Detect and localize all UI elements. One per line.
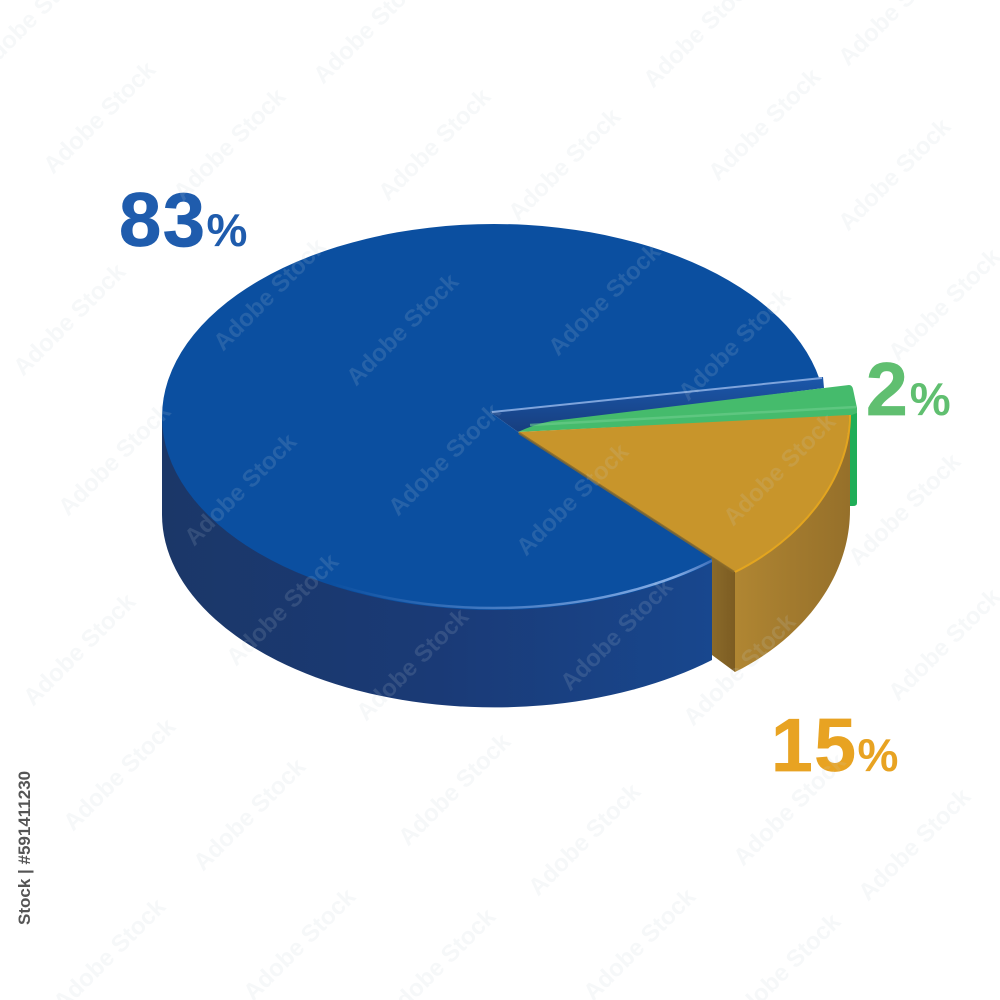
slice: 83% blue top (162, 224, 826, 610)
watermark: Adobe Stock (673, 283, 797, 406)
pie chart (162, 222, 857, 707)
watermark: Adobe Stock (393, 728, 517, 851)
watermark: Adobe Stock (341, 268, 465, 391)
highlight: green stripe (530, 407, 856, 425)
watermark: Adobe Stock (523, 778, 647, 901)
watermark: Adobe Stock (833, 113, 957, 236)
watermark: Adobe Stock (208, 233, 332, 356)
watermark: Adobe Stock (843, 448, 967, 571)
watermark: Adobe Stock (351, 603, 475, 726)
watermark: Adobe Stock (188, 753, 312, 876)
slice: 15% gold side wall (735, 415, 850, 672)
watermark: Adobe Stock (853, 783, 977, 906)
watermark: Adobe Stock (179, 428, 303, 551)
watermark: Adobe Stock (8, 258, 132, 381)
watermark: Adobe Stock (718, 408, 842, 531)
slice: 83% blue side wall (162, 417, 712, 707)
watermark: Adobe Stock (221, 548, 345, 671)
label: 15%: 15% (771, 703, 898, 787)
slice: 2% green side wall (848, 411, 857, 506)
slice: 15% gold top (518, 415, 849, 572)
watermark: Adobe Stock (728, 748, 852, 871)
watermark: Adobe Stock (38, 56, 162, 179)
watermark: Adobe Stock (168, 83, 292, 206)
highlight: gold cut edge (519, 433, 734, 572)
label: 2%: 2% (866, 347, 951, 431)
watermark: Adobe Stock (503, 103, 627, 226)
watermark: Adobe Stock (511, 438, 635, 561)
watermark: Adobe Stock (703, 63, 827, 186)
watermark: Adobe Stock (383, 398, 507, 521)
slice: 83% blue inner cut face (490, 377, 824, 432)
watermark: Adobe Stock (53, 398, 177, 521)
highlight: gold arc edge (735, 415, 850, 572)
watermark: Adobe Stock (373, 83, 497, 206)
highlight: blue cut edge (492, 378, 822, 412)
slice: 2% green top (518, 385, 857, 432)
watermark: Adobe Stock (555, 573, 679, 696)
watermark: Adobe Stock (678, 608, 802, 731)
label: 83%: 83% (119, 178, 247, 263)
stock id side text: Stock | #591411230 (15, 771, 34, 925)
highlight: blue front rim (354, 559, 712, 610)
slice: 15% gold dark cut face (712, 557, 735, 672)
watermark: Adobe Stock (543, 238, 667, 361)
watermark: Adobe Stock (58, 713, 182, 836)
watermark: Adobe Stock (18, 588, 142, 711)
